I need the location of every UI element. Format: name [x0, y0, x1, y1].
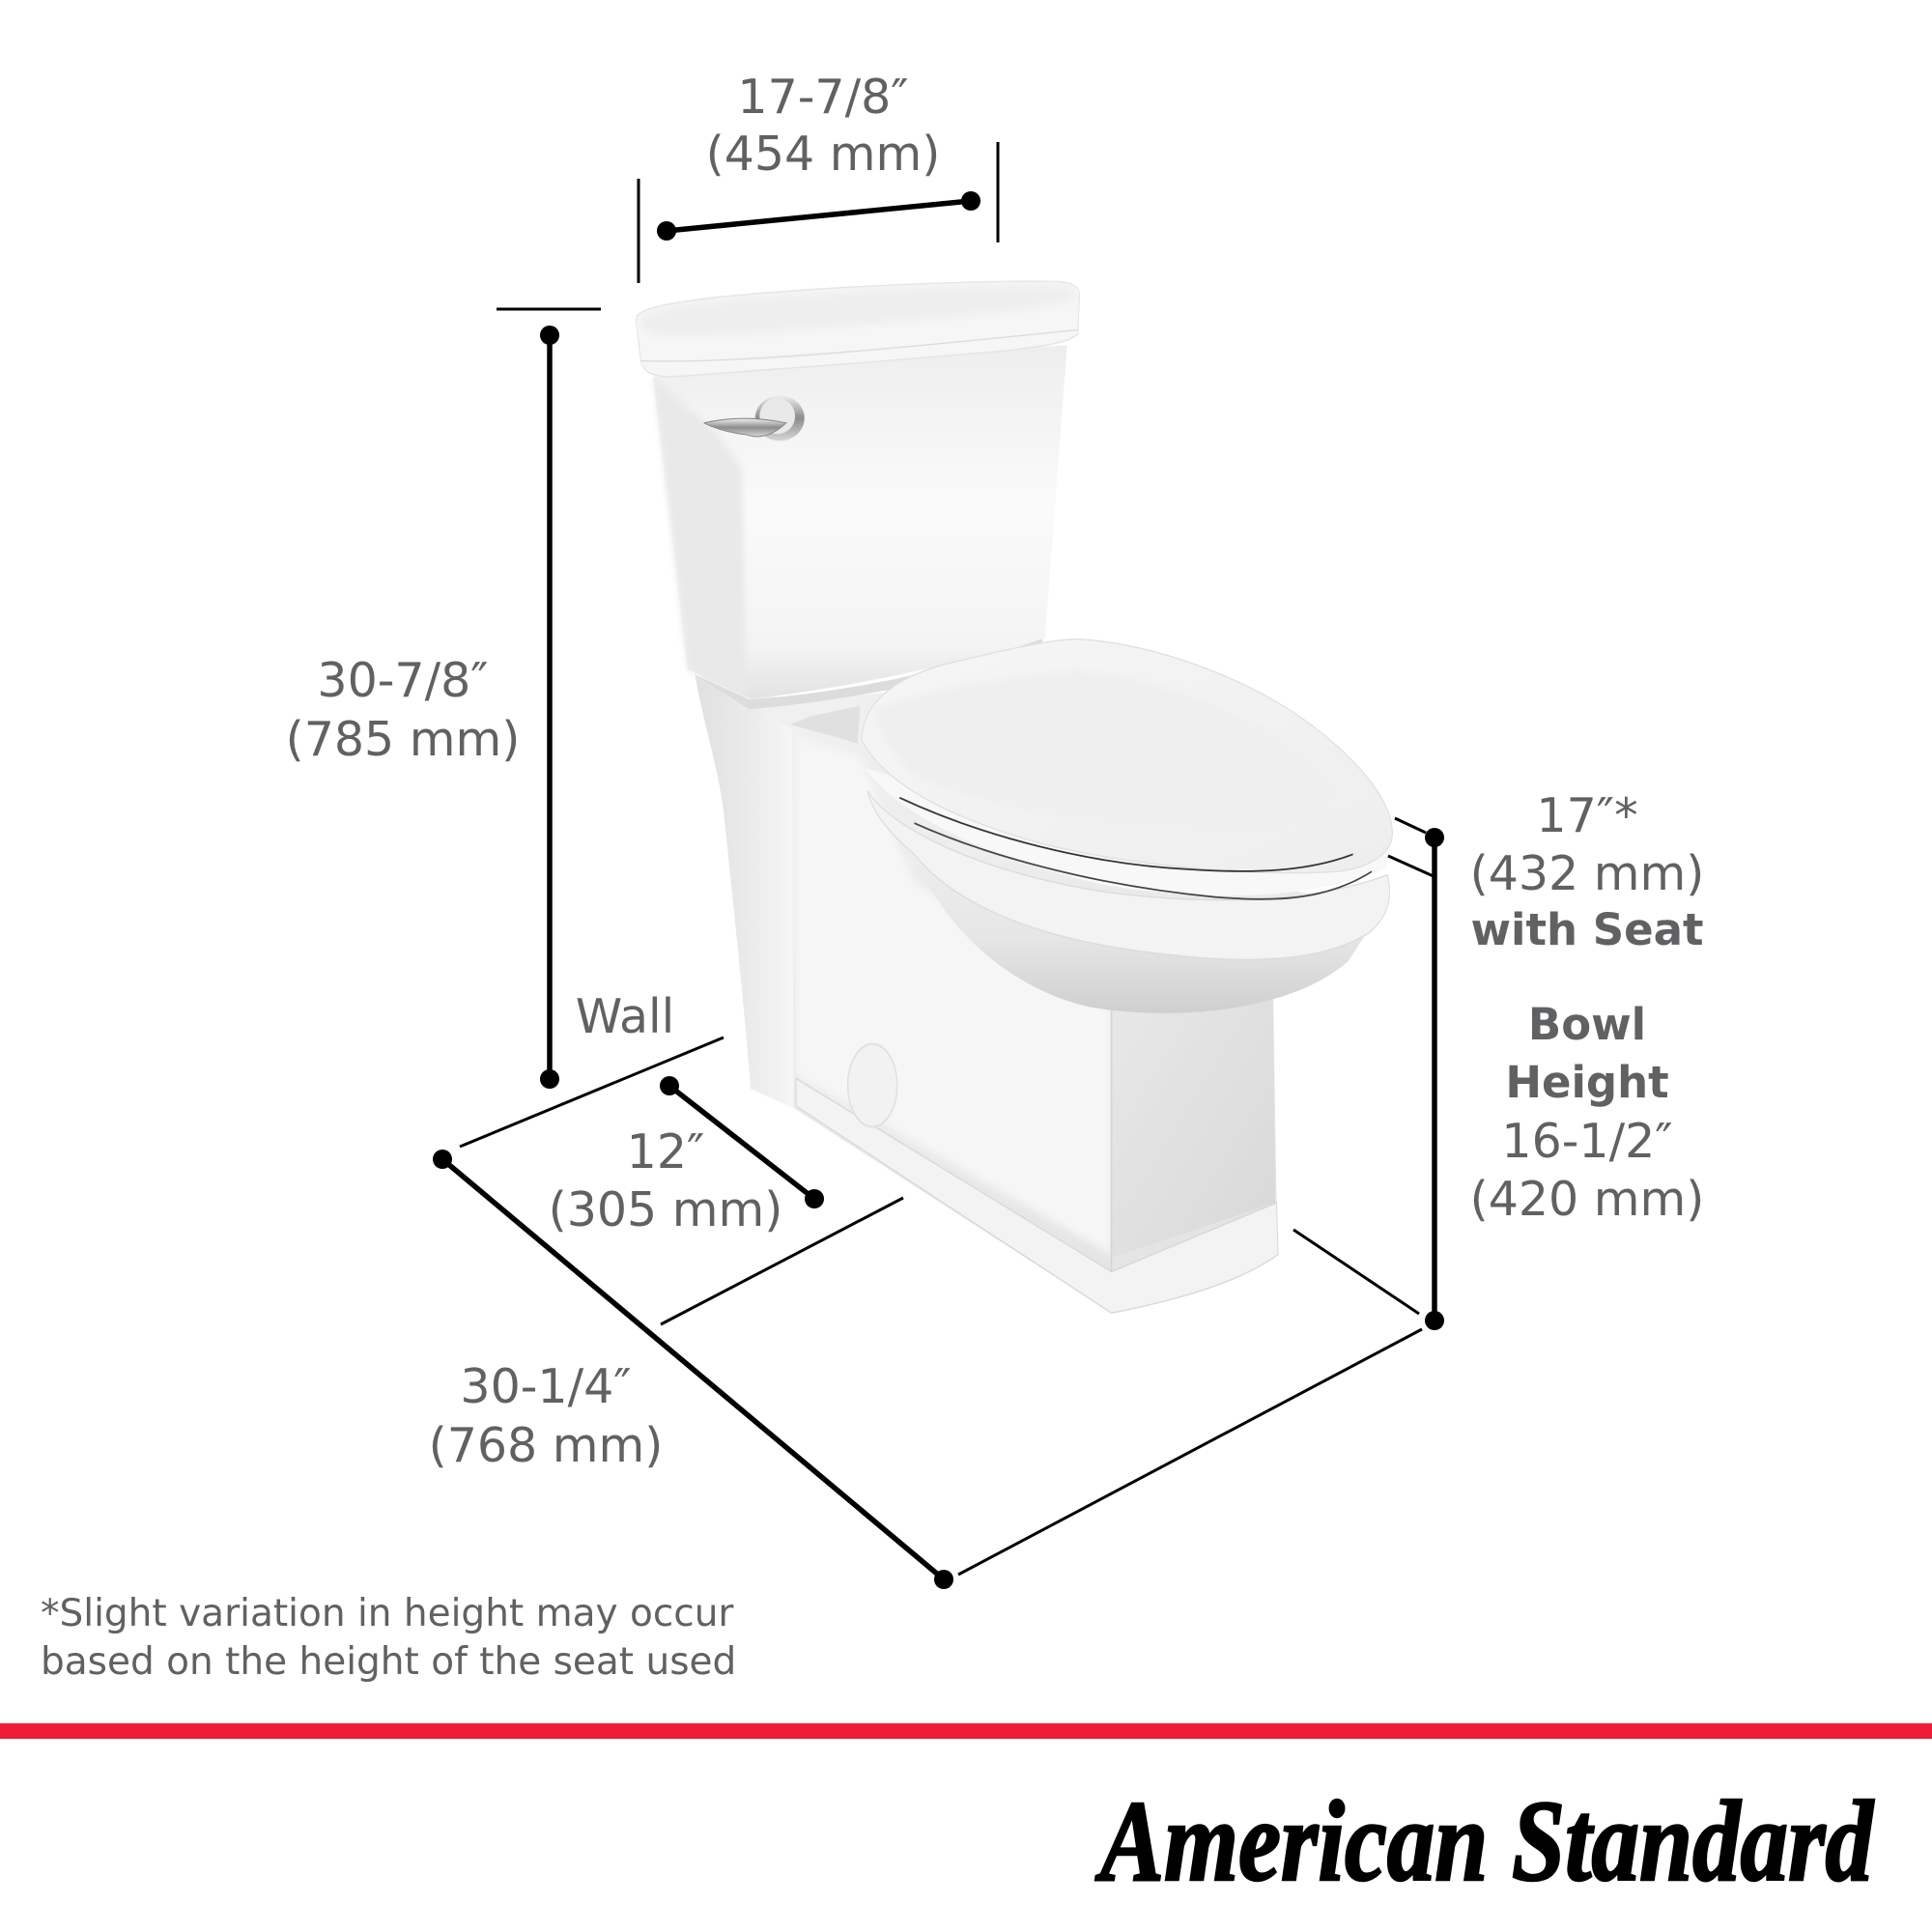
dimension: overall height	[286, 309, 601, 1089]
dimension: overall depth	[429, 1150, 1422, 1589]
toilet pedestal and base	[695, 675, 1278, 1313]
label: overall height: (785 mm)	[286, 712, 520, 767]
dimension: bowl height	[1388, 788, 1704, 1330]
supply hole cap	[848, 1044, 897, 1126]
footnote: *Slight variation in height may occur	[41, 1592, 733, 1635]
label: bowl height with seat: 16-1/2″	[1501, 1114, 1673, 1169]
label: rough-in: 12″	[627, 1124, 704, 1179]
flush handle	[704, 395, 805, 440]
tank lid	[636, 281, 1079, 377]
label: overall height: 30-7/8″	[317, 653, 489, 708]
wall label: Wall	[576, 989, 674, 1044]
label: overall depth: 30-1/4″	[460, 1359, 632, 1414]
label: bowl height with seat: Height	[1505, 1057, 1669, 1108]
label: bowl height with seat: with Seat	[1470, 904, 1704, 955]
footnote: based on the height of the seat used	[41, 1640, 736, 1684]
dimension: rough-in	[460, 1037, 903, 1324]
toilet bowl	[867, 791, 1390, 1013]
dimension: tank width	[639, 70, 998, 283]
label: rough-in: (305 mm)	[549, 1182, 782, 1237]
label: overall depth: (768 mm)	[429, 1418, 663, 1473]
label: bowl height with seat: (420 mm)	[1470, 1172, 1704, 1227]
label: bowl height with seat: 17″*	[1536, 788, 1638, 843]
toilet seat	[862, 639, 1392, 899]
red divider bar	[0, 1723, 1932, 1739]
toilet tank	[653, 345, 1067, 699]
label: tank width: (454 mm)	[706, 127, 940, 182]
label: bowl height with seat: Bowl	[1528, 999, 1646, 1050]
toilet illustration	[636, 281, 1392, 1313]
label: bowl height with seat: (432 mm)	[1470, 846, 1704, 901]
label: tank width: 17-7/8″	[737, 70, 909, 125]
